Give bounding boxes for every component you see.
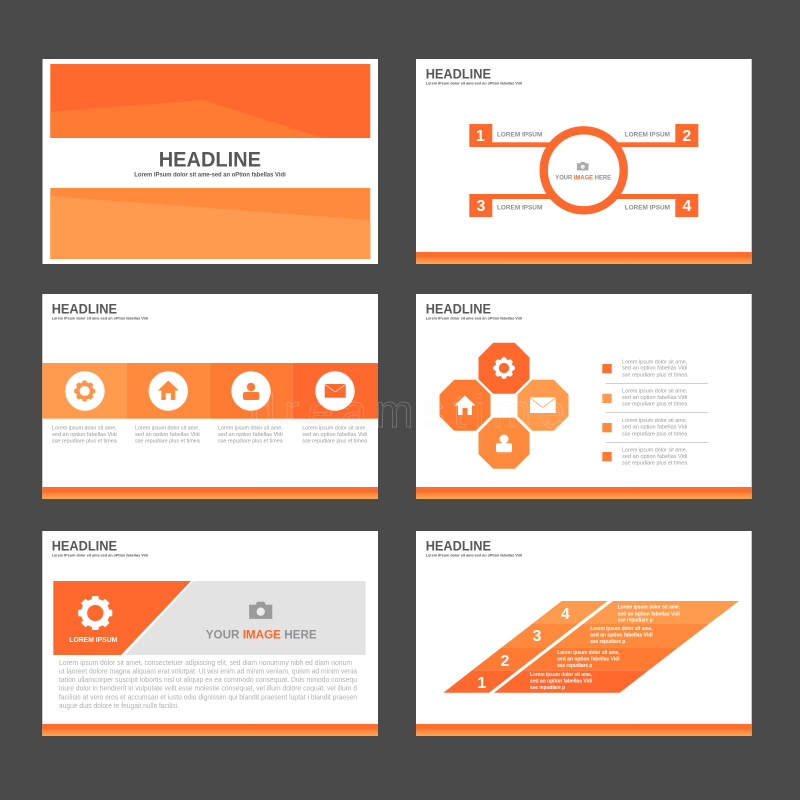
column 1: Lorem ipsum dolor sit ame, [52,426,117,432]
step 3: sse repudiare p [590,639,626,645]
column 1: sse repudiare plus et timea [52,439,117,445]
paragraph: tation ullamcorper suscipit lobortis nisl ut aliquip ex ea commodo consequat. Duis mmodo consequ [59,675,357,684]
footer bar [416,724,752,736]
item 3: 3 [477,198,486,215]
heading: HEADLINE [426,302,491,317]
column 1: sed an option fabellas Vidi [52,432,117,438]
legend item 3: sse repudiare plus et timea [622,431,687,437]
legend item 3: sed an option fabellas Vidi [622,425,687,431]
subheading: Lorem IPsum dolor sit ame-sed an oPtion fabellas Vidi [426,81,522,86]
column 2: Lorem ipsum dolor sit ame, [135,426,200,432]
step 2: sed an option fabellas Vidi [557,657,620,663]
panel: circle diagram slide [416,59,752,264]
orange label block: LOREM IPSUM [69,637,117,644]
item 2: 2 [682,128,691,145]
column 3: sed an option fabellas Vidi [218,432,283,438]
step 3 [502,624,709,647]
legend item 3: Lorem ipsum dolor sit ame, [622,418,688,424]
central ring [544,130,624,210]
connector bars [492,142,676,199]
watermark: dreamstime [250,385,565,437]
step 1: Lorem ipsum dolor sit ame, [530,672,593,678]
column 4 [292,363,378,445]
legend item 4: sse repudiare plus et timea [622,461,687,467]
panel: image and paragraph slide [42,531,378,736]
column 2: sse repudiare plus et timea [135,439,200,445]
step 2: 2 [501,653,510,670]
column 3: Lorem ipsum dolor sit ame, [218,426,283,432]
legend item 1: sse repudiare plus et timea [622,372,687,378]
footer bar [42,724,378,736]
column 2: sed an option fabellas Vidi [135,432,200,438]
step 3: 3 [533,628,542,645]
legend item 4 [602,447,688,467]
item 3 [469,194,542,217]
panel: octagon slide [416,294,752,499]
item 2 [625,124,698,147]
item 1: LOREM IPSUM [497,131,542,138]
step 1: sse repudiare p [530,685,566,691]
legend item 1 [602,359,688,378]
panel: parallelogram steps slide [416,531,752,736]
step 2: Lorem ipsum dolor sit ame, [557,650,620,656]
column 4: sse repudiare plus et timea [302,439,367,445]
step 1: 1 [477,675,486,692]
top orange banner [50,64,370,138]
paragraph: Lorem ipsum dolor sit amet, consectetuer adipiscing elit, sed diam nonummy nibh ed diam nonum [59,658,352,667]
orange label block [53,581,191,655]
item 1 [469,124,542,147]
step 4: sse repudiare p [618,618,653,624]
heading: HEADLINE [52,302,117,317]
legend item 4: Lorem ipsum dolor sit ame, [622,447,688,453]
heading: HEADLINE [52,539,117,554]
octagon: person [478,418,530,469]
item 2: LOREM IPSUM [625,131,670,138]
grey image placeholder [125,581,366,655]
step 2: sse repudiare p [557,663,593,669]
subheading: Lorem IPsum dolor sit ame-sed an oPtion fabellas Vidi [52,553,148,558]
legend item 1: Lorem ipsum dolor sit ame, [622,359,688,365]
column 1 [42,363,126,445]
title subtitle: Lorem IPsum dolor sit ame-sed an oPtion fabellas Vidi [134,171,286,178]
subheading: Lorem IPsum dolor sit ame-sed an oPtion fabellas Vidi [52,316,148,321]
legend item 4: sed an option fabellas Vidi [622,454,687,460]
paragraph: facilisis at vero eros et accumsan et iusto odio dignissim qui blandit praesent luptat i blandit praesen [59,692,357,701]
column 4: Lorem ipsum dolor sit ame, [302,426,367,432]
legend item 3 [602,418,688,437]
step 4: Lorem ipsum dolor sit ame, [618,605,680,611]
bottom orange banner [50,188,370,259]
subheading: Lorem IPsum dolor sit ame-sed an oPtion fabellas Vidi [426,316,522,321]
column 2 [126,363,210,445]
paragraph: ut laoreet dolore magna aliquam erat volutpat. Ut wisi enim ad minim veniam, quism ad minim venia [59,667,357,676]
footer bar [416,487,752,499]
heading: HEADLINE [426,67,491,82]
column 3: sse repudiare plus et timea [218,439,283,445]
column 3 [210,363,292,445]
step 1 [443,670,649,693]
title headline: HEADLINE [159,148,261,172]
item 3: LOREM IPSUM [497,205,542,212]
paragraph: augue duis dolore te feugait nulla facilisi. [59,701,179,710]
heading: HEADLINE [426,539,491,554]
legend item 2 [602,389,688,408]
legend item 2: sse repudiare plus et timea [622,402,687,408]
step 4 [532,601,739,624]
step 3: Lorem ipsum dolor sit ame, [590,626,653,632]
step 4: sed an option fabellas Vidi [618,611,680,617]
item 1: 1 [476,128,485,145]
item 4 [625,194,698,217]
column 4: sed an option fabellas Vidi [302,432,367,438]
step 3: sed an option fabellas Vidi [590,633,653,639]
legend item 1: sed an option fabellas Vidi [622,366,687,372]
legend item 2: sed an option fabellas Vidi [622,395,687,401]
icon: camera [577,162,588,170]
step 1: sed an option fabellas Vidi [530,678,593,684]
subheading: Lorem IPsum dolor sit ame-sed an oPtion fabellas Vidi [426,553,522,558]
octagon: mail [518,380,568,431]
step 4: 4 [561,606,570,623]
octagon: home [440,380,490,431]
grey image placeholder: YOUR IMAGE HERE [206,627,317,641]
image placeholder label: YOUR IMAGE HERE [555,175,612,182]
footer bar [416,252,752,264]
legend item 2: Lorem ipsum dolor sit ame, [622,389,688,395]
item 4: 4 [683,198,692,215]
panel: four column icon slide [42,294,378,499]
paragraph: iriure dolor in hendrerit in vulputate velit esse molestie consequat, vel illum dolore coquat, vel illum d [59,684,357,693]
footer bar [42,487,378,499]
paragraph [59,658,357,710]
item 4: LOREM IPSUM [625,205,670,212]
step 2 [472,647,678,670]
panel: title slide [42,59,378,264]
octagon: gear [478,343,530,394]
